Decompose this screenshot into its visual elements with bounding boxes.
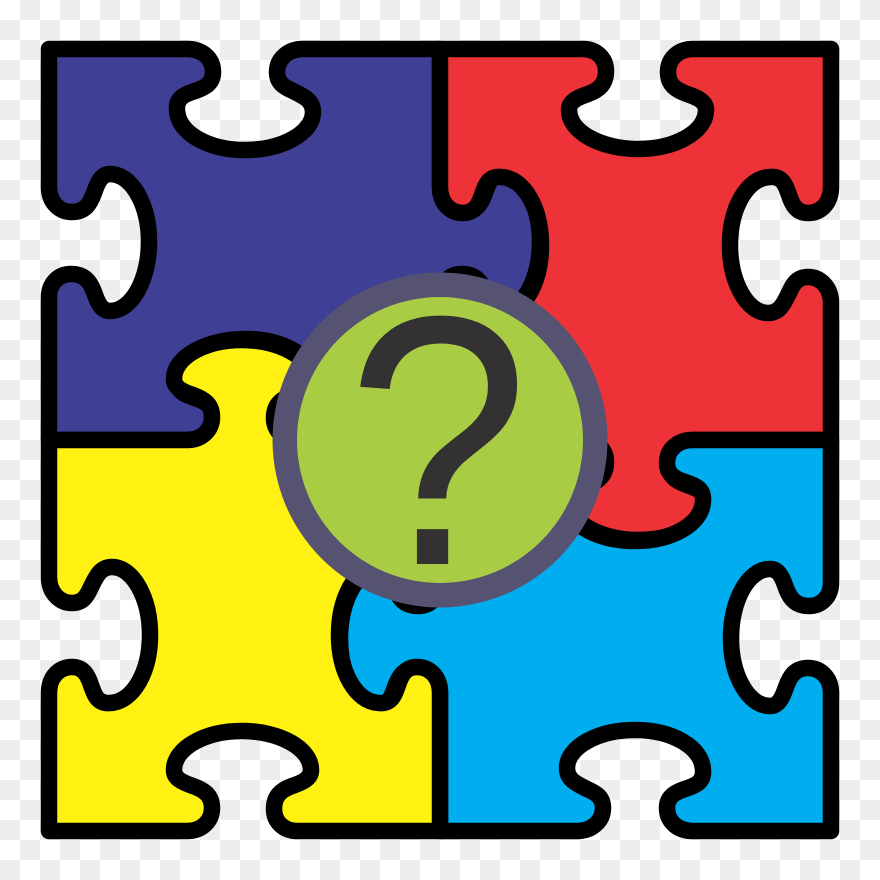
puzzle piece: cyan bottom-right	[340, 440, 831, 831]
badge ring	[272, 272, 608, 608]
puzzle piece: blue top-left	[49, 49, 540, 440]
badge green disc	[297, 297, 583, 583]
badge: question mark circle	[272, 242, 608, 640]
question mark: ?	[347, 242, 529, 640]
puzzle piece: yellow bottom-left	[49, 340, 440, 831]
puzzle piece: red top-right	[440, 49, 831, 540]
